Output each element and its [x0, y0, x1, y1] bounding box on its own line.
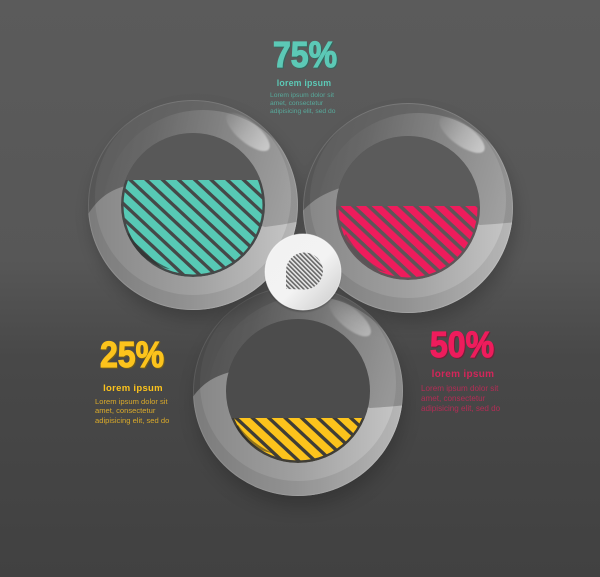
gloss highlight — [221, 107, 275, 157]
body text — [95, 397, 169, 425]
body text: Lorem ipsum dolor sit — [270, 92, 334, 99]
heading: lorem ipsum — [277, 78, 331, 88]
panel: yellow glass ring 25% — [190, 285, 408, 501]
heading: lorem ipsum — [432, 369, 494, 380]
heading: lorem ipsum — [103, 383, 163, 394]
ring rim — [304, 104, 512, 312]
25% number: 25% — [100, 334, 164, 375]
body text — [421, 384, 501, 413]
body text: adipisicing elit, sed do — [95, 416, 169, 425]
gloss highlight — [434, 111, 490, 159]
panel: pink glass ring 50% — [300, 102, 518, 318]
ring shadows: top pair — [92, 110, 515, 322]
body text: amet, consectetur — [421, 394, 486, 403]
50% number: 50% — [430, 324, 494, 365]
glass ring body — [190, 285, 408, 501]
callout: 50% — [421, 324, 501, 413]
pink striped liquid — [336, 136, 480, 280]
75% number: 75% — [274, 35, 338, 76]
callout: 25% — [95, 334, 169, 425]
gloss highlight — [324, 294, 376, 342]
body text: Lorem ipsum dolor sit — [95, 397, 168, 406]
body text: adipisicing elit, sed do — [421, 404, 501, 413]
glass ring body — [300, 102, 518, 318]
ring rim — [194, 286, 402, 496]
75% number: 75% — [273, 34, 337, 75]
callout: 75% — [270, 34, 338, 115]
teal striped liquid — [121, 133, 265, 277]
25% number: 25% — [101, 335, 165, 376]
glass ring body — [85, 99, 303, 315]
50% number: 50% — [431, 325, 495, 366]
body text — [270, 92, 336, 115]
body text: amet, consectetur — [95, 406, 156, 415]
center disc — [265, 234, 341, 312]
body text: amet, consectetur — [270, 100, 324, 107]
body text: adipisicing elit, sed do — [270, 108, 336, 115]
yellow striped liquid — [226, 319, 370, 463]
panel: teal glass ring 75% — [85, 99, 303, 315]
icon: striped drop — [286, 253, 323, 290]
ring shadow: yellow — [196, 298, 404, 506]
body text: Lorem ipsum dolor sit — [421, 384, 499, 393]
ring rim — [88, 100, 298, 310]
